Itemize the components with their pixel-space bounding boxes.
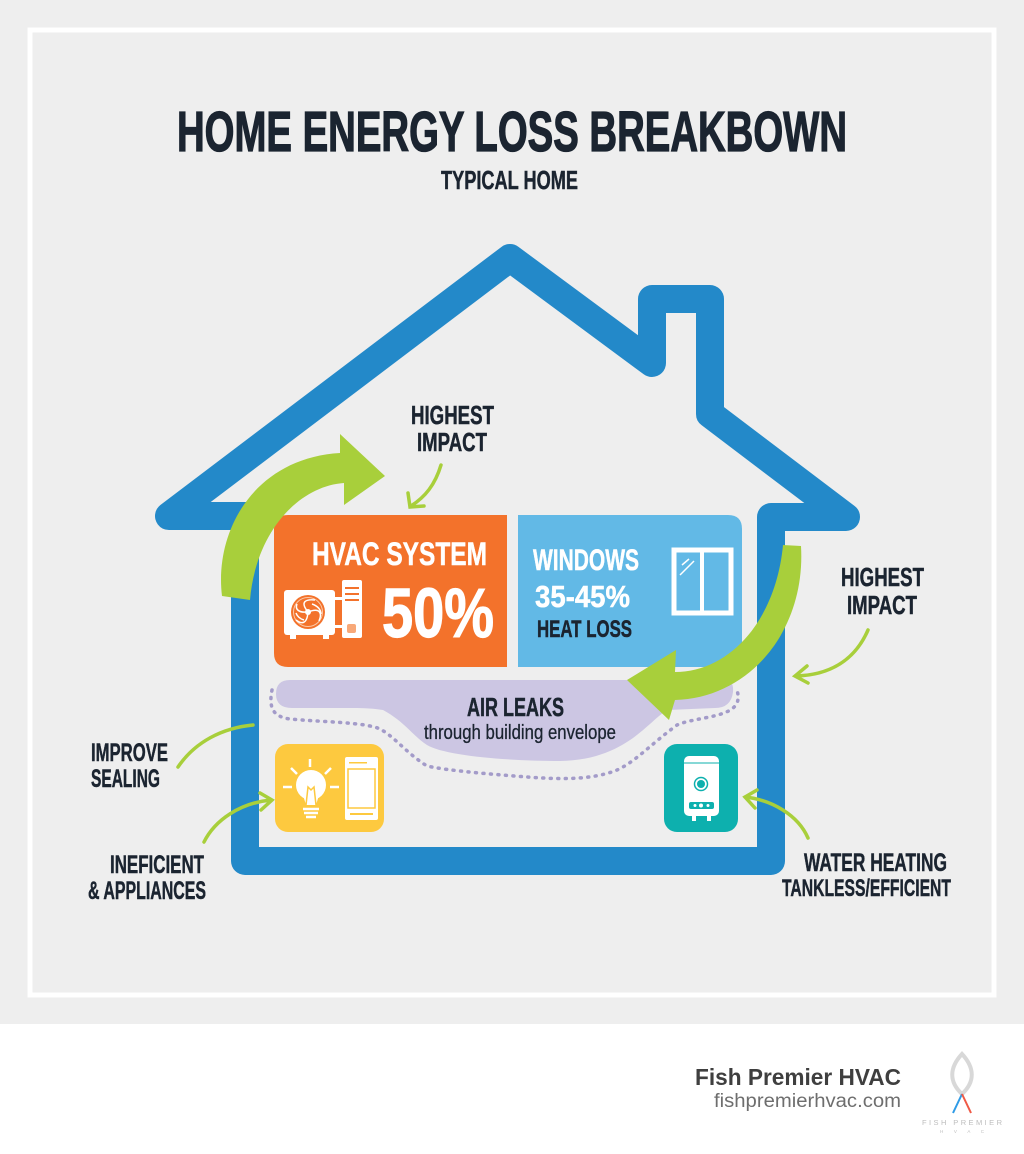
icon: appliance — [345, 757, 378, 820]
arrow: highest impact top — [408, 465, 441, 507]
air leaks heading: AIR LEAKS — [467, 692, 564, 722]
arrow: large green left — [221, 434, 385, 600]
HVAC heading: HVAC SYSTEM — [312, 536, 487, 572]
label: improve sealing — [91, 739, 168, 793]
label: highest impact right — [841, 562, 924, 620]
label: improve sealing: IMPROVE — [91, 739, 168, 767]
panel: appliances — [275, 744, 384, 832]
panel: water heating — [664, 744, 738, 832]
label: highest impact right: HIGHEST — [841, 562, 924, 592]
panel: windows — [518, 515, 742, 667]
subtitle: TYPICAL HOME — [441, 165, 578, 195]
label: highest impact right: IMPACT — [847, 590, 917, 620]
arrow: inefficient appliances — [204, 793, 272, 842]
windows percentage: 35-45% — [535, 579, 630, 614]
label: highest impact top — [411, 400, 494, 457]
arrow: large green right — [627, 545, 801, 720]
label: highest impact top: HIGHEST — [411, 400, 494, 430]
heat loss label: HEAT LOSS — [537, 616, 632, 643]
icon: water heater — [684, 756, 719, 821]
air leaks subtext: through building envelope — [424, 722, 616, 744]
panel: HVAC system — [274, 515, 507, 667]
arrow: improve sealing — [178, 725, 253, 767]
label: inefficient appliances: INEFICIENT — [110, 851, 204, 879]
dotted envelope line — [271, 690, 738, 779]
footer brand: fishpremierhvac.com — [714, 1091, 901, 1112]
label: inefficient appliances: & APPLIANCES — [88, 877, 206, 905]
label: improve sealing: SEALING — [91, 765, 160, 793]
HVAC percentage: 50% — [382, 574, 494, 652]
label: inefficient appliances — [88, 851, 206, 905]
windows heading: WINDOWS — [533, 544, 639, 577]
arrow: water heating — [745, 790, 808, 838]
logo: H V A C — [940, 1129, 985, 1134]
label: water heating — [782, 849, 951, 902]
arrow: highest impact right — [795, 630, 868, 683]
panel: air leaks — [271, 680, 738, 779]
logo — [922, 1054, 1003, 1134]
label: water heating: WATER HEATING — [804, 849, 947, 877]
house outline — [169, 258, 846, 861]
icon: window — [674, 550, 731, 613]
footer brand: Fish Premier HVAC — [695, 1064, 901, 1090]
logo: FISH PREMIER — [922, 1118, 1003, 1127]
label: highest impact top: IMPACT — [417, 427, 487, 457]
footer brand — [695, 1064, 901, 1112]
icon: light bulb — [283, 759, 339, 817]
icon: air conditioner — [284, 580, 362, 639]
